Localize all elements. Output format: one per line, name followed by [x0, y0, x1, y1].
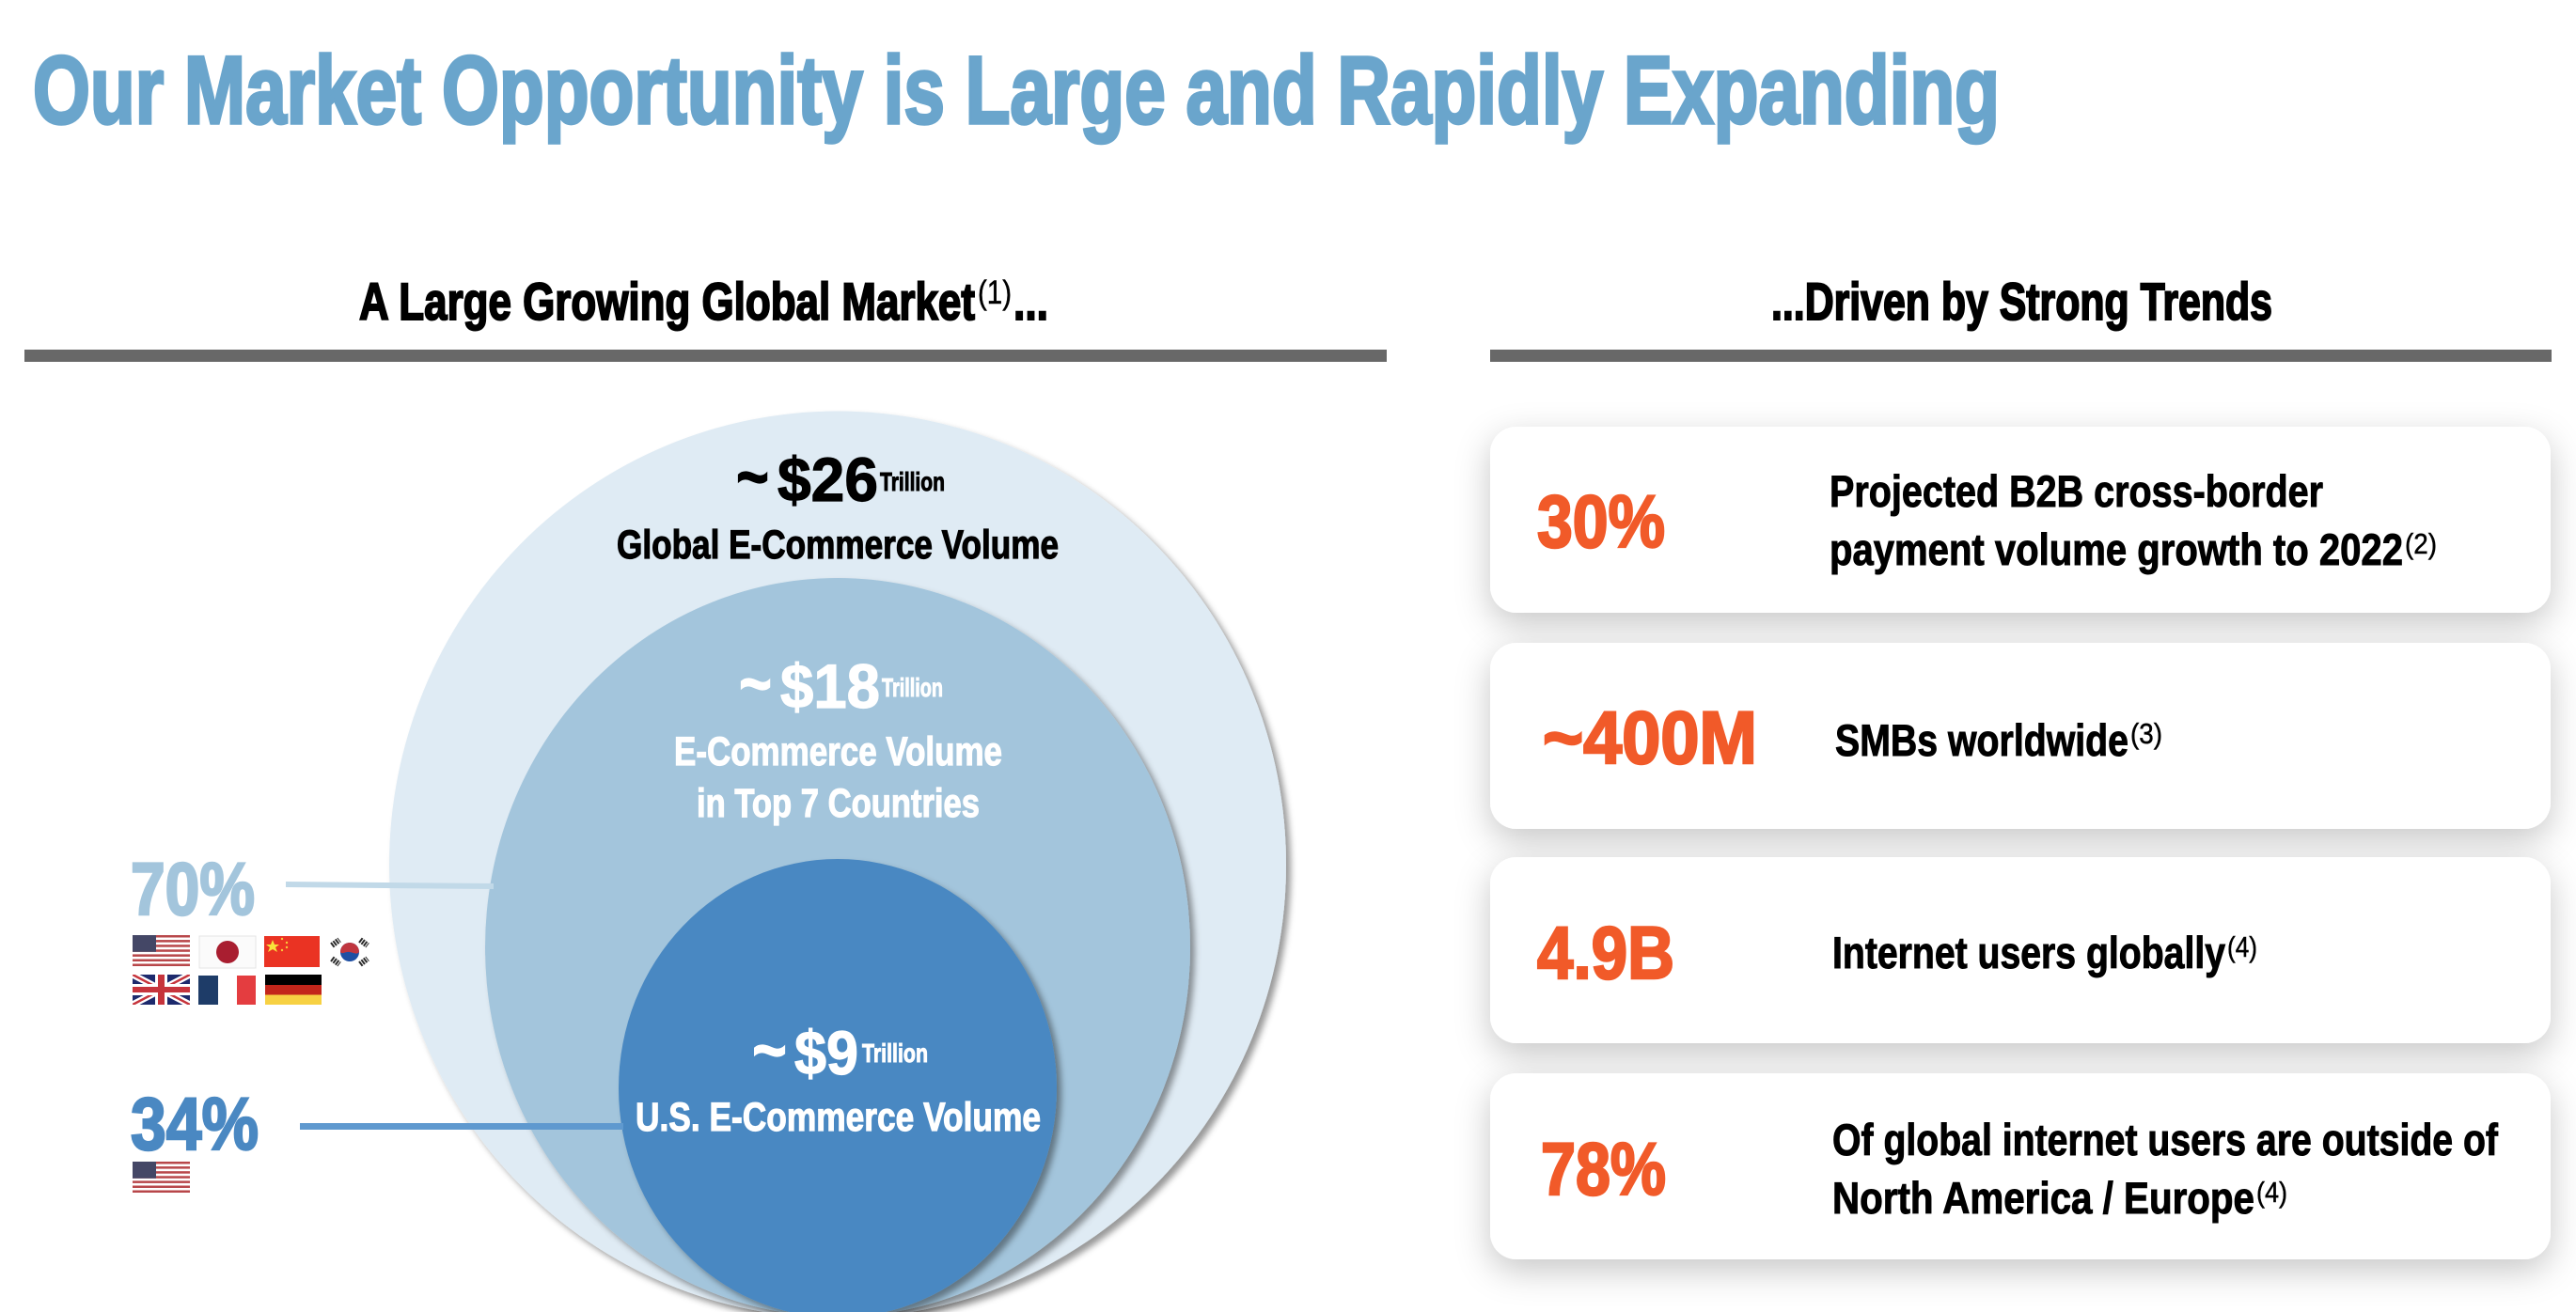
- description: users outside NA/Europe: [1832, 1115, 2498, 1223]
- label: top 7 volume: E-Commerce Volume: [674, 729, 1002, 774]
- panel: trend 400M: [1490, 643, 2551, 829]
- label: U.S. volume: [636, 1010, 1041, 1140]
- stat: 70%: 70%: [131, 847, 255, 930]
- label: U.S. volume: U.S. E-Commerce Volume: [636, 1095, 1041, 1140]
- flag: Japan: [199, 936, 256, 968]
- left column heading: ...: [1013, 272, 1048, 331]
- title: Our Market Opportunity is Large and Rapidly Expanding: [33, 37, 2000, 144]
- description: users outside NA/Europe: (4): [2256, 1176, 2287, 1209]
- label: top 7 volume: Trillion: [882, 673, 943, 702]
- flag: Germany: [265, 975, 322, 1005]
- flags: top 7 countries: [133, 935, 368, 1005]
- description: internet users: Internet users globally: [1832, 928, 2225, 977]
- label: top 7 volume: ~: [739, 644, 772, 724]
- right column heading: ...Driven by Strong Trends: [1771, 272, 2272, 331]
- flag: China: [264, 936, 320, 967]
- description: SMBs worldwide: SMBs worldwide: [1835, 715, 2128, 765]
- flag: South Korea: [332, 940, 368, 964]
- stat: 34%: 34%: [131, 1082, 259, 1165]
- figure: ~400M: ~400M: [1543, 695, 1757, 779]
- description: B2B payment growth: (2): [2405, 527, 2437, 560]
- description: B2B payment growth: payment volume growth to 2022: [1830, 524, 2403, 574]
- label: U.S. volume: ~: [752, 1010, 787, 1090]
- left column heading: A Large Growing Global Market: [359, 272, 975, 331]
- left heading rule: [24, 350, 1387, 362]
- circle: global e-commerce: [389, 412, 1286, 1312]
- right heading rule: [1490, 350, 2552, 362]
- label: U.S. volume: $9: [794, 1018, 858, 1087]
- flag: United Kingdom: [133, 975, 190, 1005]
- connector line: 70%: [286, 882, 494, 889]
- flag: France: [198, 976, 256, 1005]
- panel: trend 4.9B: [1490, 857, 2551, 1043]
- panel: trend 30%: [1490, 427, 2551, 613]
- label: top 7 volume: in Top 7 Countries: [697, 781, 980, 826]
- figure: 30%: 30%: [1537, 479, 1665, 563]
- label: global volume: $26: [778, 445, 878, 514]
- circle: U.S. e-commerce: [619, 859, 1057, 1312]
- label: global volume: ~: [736, 437, 769, 517]
- label: top 7 volume: $18: [780, 651, 880, 721]
- description: B2B payment growth: Projected B2B cross-border: [1830, 466, 2323, 516]
- flag: United States: [133, 935, 190, 966]
- label: U.S. volume: Trillion: [862, 1039, 928, 1068]
- figure: 4.9B: 4.9B: [1537, 911, 1674, 994]
- circle: top 7 countries: [485, 578, 1190, 1312]
- description: users outside NA/Europe: North America / Europe: [1832, 1173, 2254, 1223]
- description: internet users: (4): [2227, 930, 2257, 963]
- flag: United States (34%): [133, 1162, 190, 1193]
- label: top 7 volume: [674, 644, 1002, 826]
- description: B2B payment growth: [1830, 466, 2437, 574]
- nested circle chart: [389, 412, 1286, 1312]
- panel: trend 78%: [1490, 1073, 2551, 1259]
- label: global volume: Global E-Commerce Volume: [617, 523, 1059, 568]
- label: global volume: Trillion: [880, 467, 945, 496]
- figure: 78%: 78%: [1541, 1127, 1666, 1210]
- description: SMBs worldwide: (3): [2130, 717, 2162, 750]
- left column heading: (1): [978, 274, 1012, 311]
- connector line: 34%: [300, 1123, 623, 1130]
- label: global volume: [617, 437, 1059, 568]
